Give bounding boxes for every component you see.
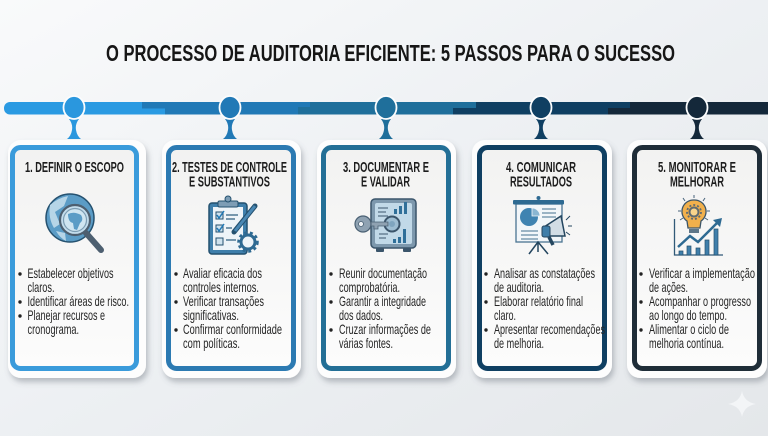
bullet list: step 1: Planejar recursos e — [28, 307, 105, 323]
bullet list: step 4 — [484, 265, 605, 351]
timeline node 1 — [64, 96, 84, 139]
bullet list: step 4: de melhoria. — [494, 335, 544, 351]
heading: step 2: 2. TESTES DE CONTROLE — [172, 159, 287, 176]
timeline node 4 — [530, 96, 552, 139]
bullet list: step 3: Cruzar informações de — [339, 321, 431, 337]
bullet list: step 1 — [18, 265, 129, 337]
icon: light bulb with growth chart — [674, 195, 723, 255]
heading: step 3: E VALIDAR — [361, 174, 410, 190]
timeline bar — [4, 102, 768, 114]
heading: step 2: E SUBSTANTIVOS — [189, 174, 270, 190]
bullet list: step 3 — [329, 265, 431, 351]
bullet list: step 3: várias fontes. — [339, 335, 393, 351]
icon: safe with key — [355, 199, 416, 252]
bullet list: step 5: Alimentar o ciclo de — [649, 321, 729, 337]
bullet list: step 5: ao longo do tempo. — [649, 307, 727, 323]
bullet list: step 1: Identificar áreas de risco. — [28, 293, 129, 309]
bullet list: step 3: Reunir documentação — [339, 265, 427, 281]
bullet list: step 1: claros. — [28, 279, 54, 295]
panel: step 4 — [472, 140, 612, 378]
panel: step 1 — [8, 140, 146, 378]
icon: globe with magnifier — [46, 194, 101, 250]
heading: step 4: RESULTADOS — [510, 174, 572, 190]
bullet list: step 5: melhoria contínua. — [649, 335, 724, 351]
bullet list: step 3: dos dados. — [339, 307, 383, 323]
panel: step 3 — [317, 140, 456, 378]
bullet list: step 2: Verificar transações — [183, 293, 264, 309]
bullet list: step 3: comprobatória. — [339, 279, 400, 295]
bullet list: step 2: Confirmar conformidade — [183, 321, 282, 337]
bullet list: step 5 — [639, 265, 755, 351]
heading: step 4 — [506, 159, 576, 190]
panel: step 5 — [627, 140, 767, 378]
bullet list: step 2: significativas. — [183, 307, 239, 323]
icon: clipboard with pen and gear — [209, 196, 258, 254]
bullet list: step 4: claro. — [494, 307, 516, 323]
timeline node 5 — [686, 96, 708, 139]
timeline node 2 — [220, 96, 240, 139]
bullet list: step 1: cronograma. — [28, 321, 79, 337]
icon: presentation board with megaphone — [513, 196, 572, 254]
heading: step 1: 1. DEFINIR O ESCOPO — [25, 159, 124, 176]
bullet list: step 4: Apresentar recomendações — [494, 321, 605, 337]
icon: sparkle watermark — [728, 391, 756, 417]
bullet list: step 4: Analisar as constatações — [494, 265, 595, 281]
bullet list: step 1: Estabelecer objetivos — [28, 265, 114, 281]
heading: step 5 — [658, 159, 736, 190]
bullet list: step 2 — [174, 265, 282, 351]
bullet list: step 5: de ações. — [649, 279, 688, 295]
bullet list: step 3: Garantir a integridade — [339, 293, 426, 309]
heading: step 4: 4. COMUNICAR — [506, 159, 576, 176]
bullet list: step 4: Elaborar relatório final — [494, 293, 583, 309]
heading: step 3 — [343, 159, 429, 190]
timeline node 3 — [376, 96, 396, 139]
bullet list: step 2: Avaliar eficacia dos — [183, 265, 262, 281]
bullet list: step 4: de auditoria. — [494, 279, 544, 295]
bullet list: step 2: com políticas. — [183, 335, 240, 351]
panel: step 2 — [162, 140, 301, 378]
heading: step 2 — [172, 159, 287, 190]
bullet list: step 2: controles internos. — [183, 279, 259, 295]
heading: step 3: 3. DOCUMENTAR E — [343, 159, 429, 176]
heading: step 5: MELHORAR — [670, 174, 724, 190]
